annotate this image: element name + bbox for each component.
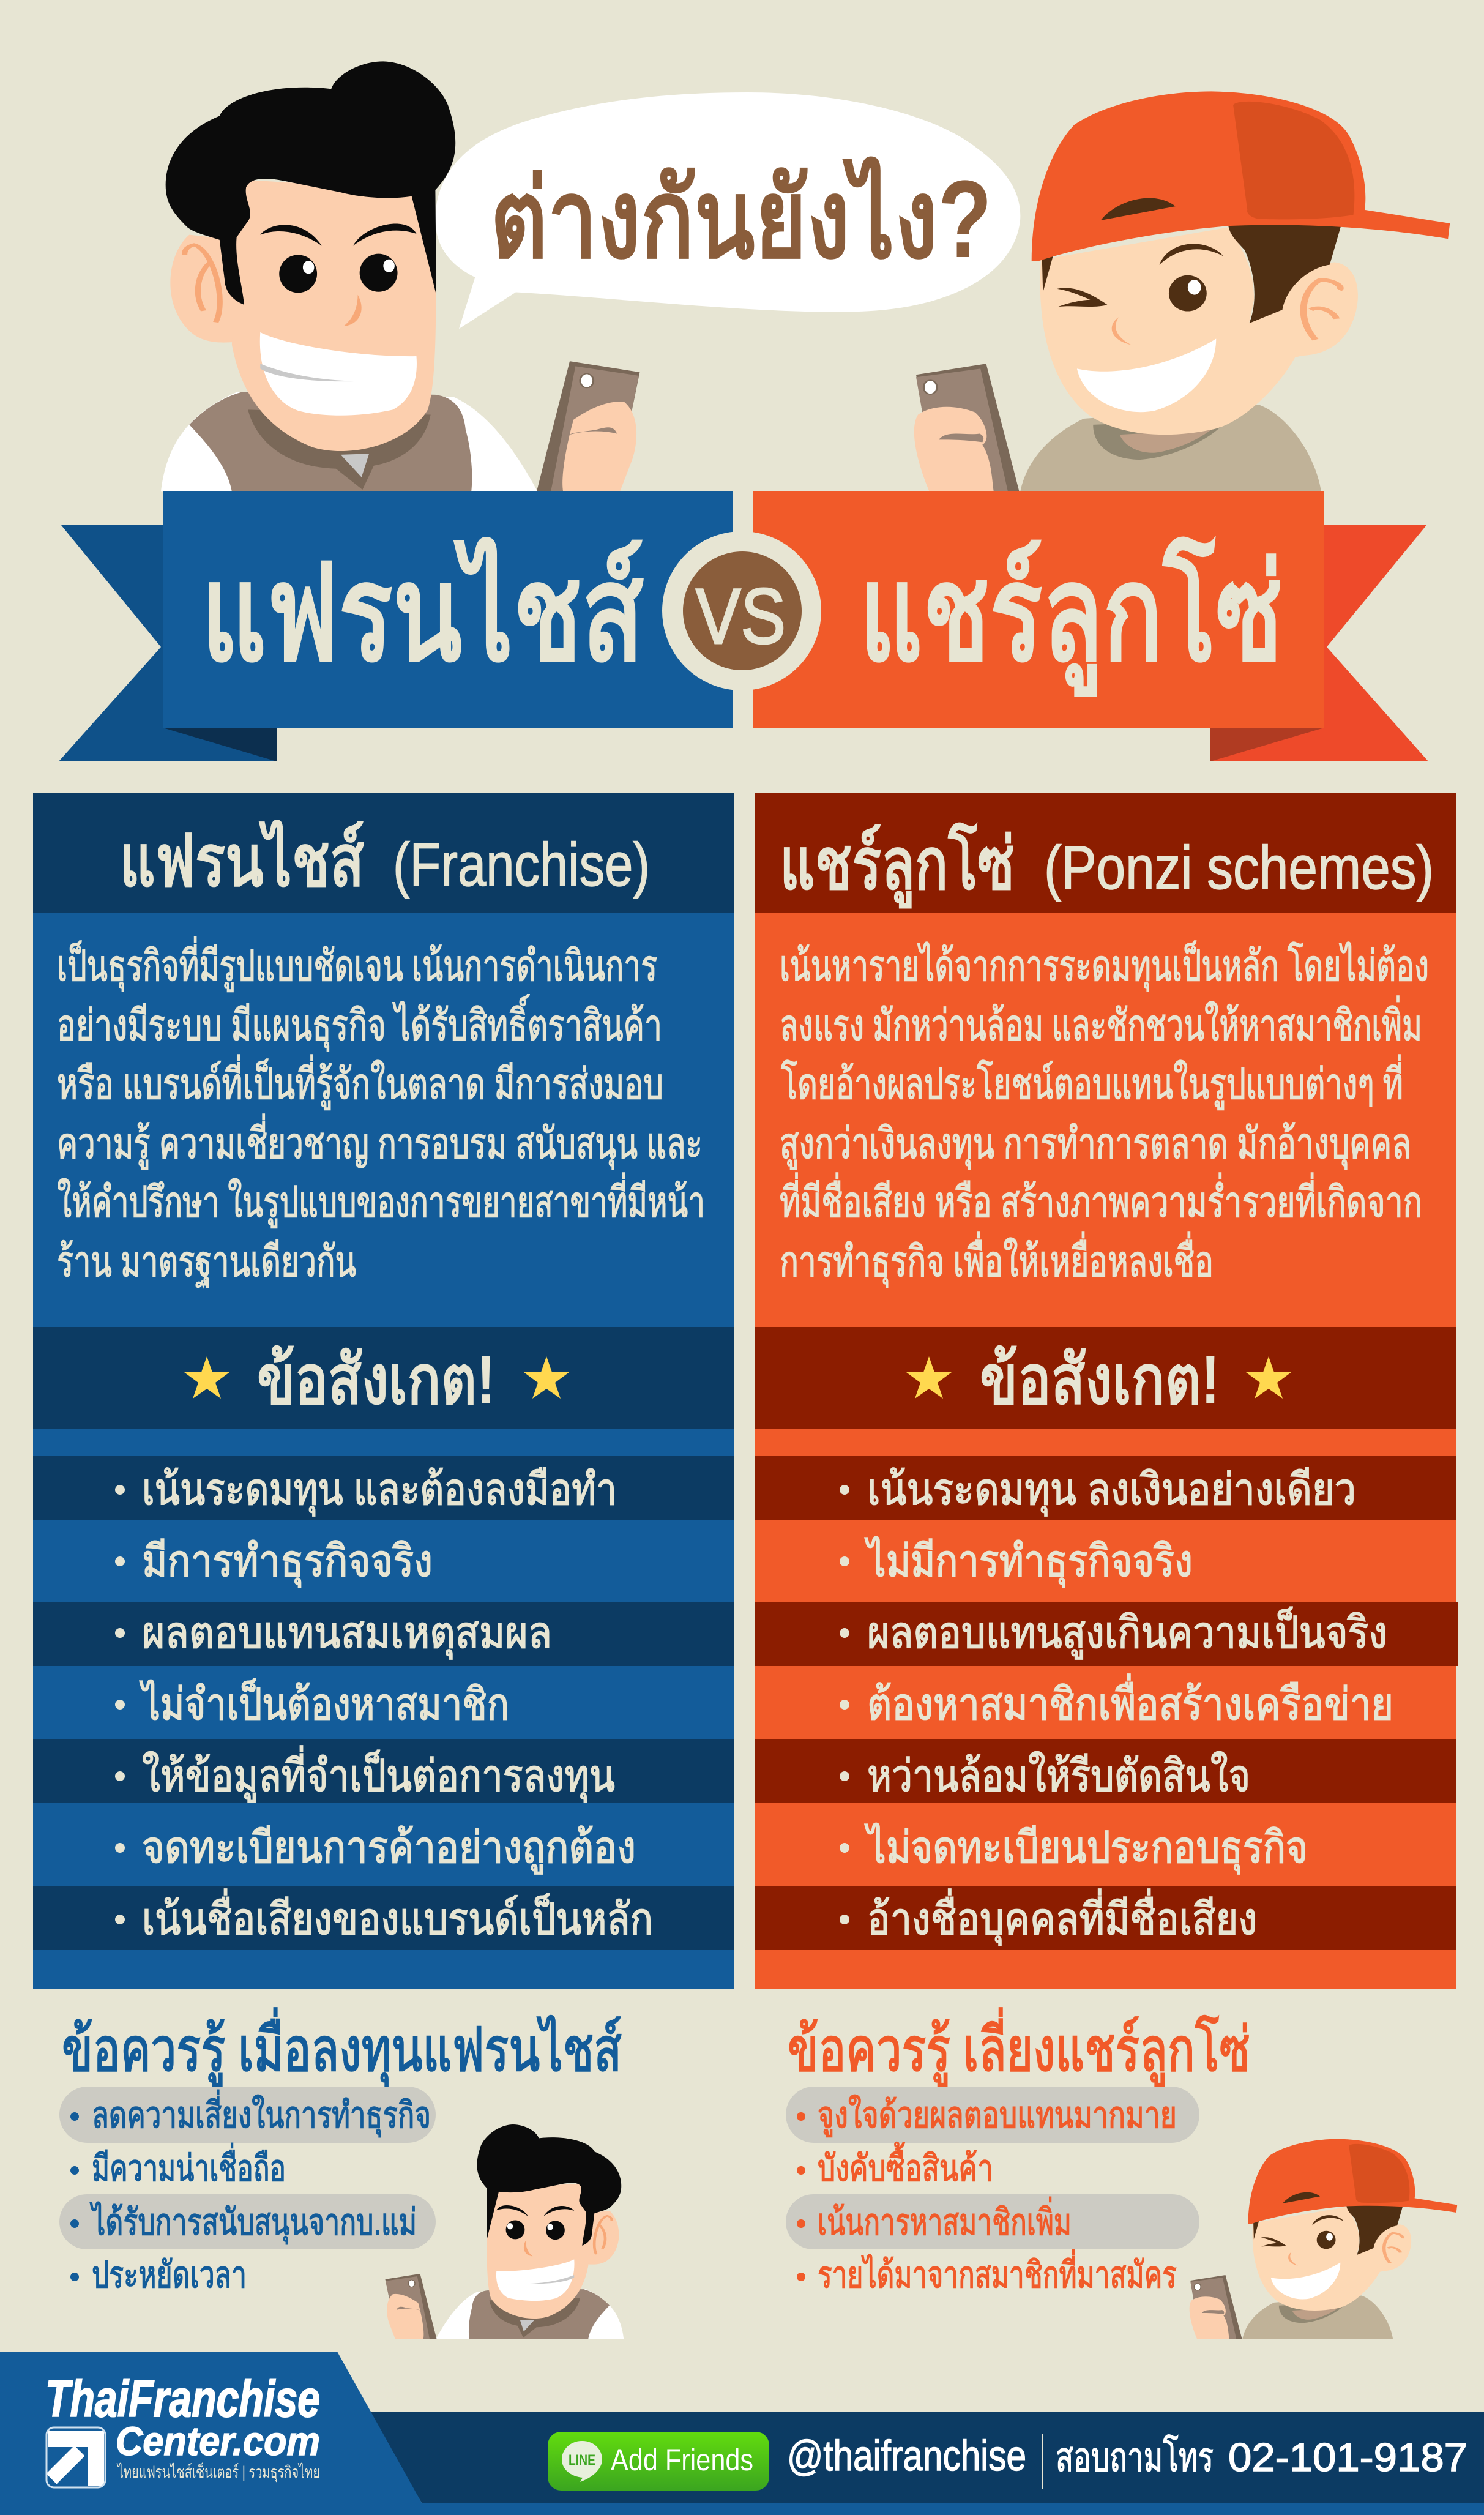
VS badge bbox=[662, 531, 821, 690]
warning signs heading: ponzi: ข้อสังเกต! bbox=[980, 1342, 1220, 1418]
list rows: franchise: ให้ข้อมูลที่จำเป็นต่อการลงทุน bbox=[142, 1746, 615, 1803]
icon: LINE bubble: LINE bbox=[569, 2452, 595, 2468]
list rows: ponzi: ต้องหาสมาชิกเพื่อสร้างเครือข่าย bbox=[867, 1674, 1393, 1729]
tips list: franchise: มีความน่าเชื่อถือ bbox=[92, 2143, 286, 2189]
panel heading: franchise: แฟรนไชส์ bbox=[119, 820, 364, 902]
tips list: ponzi: เน้นการหาสมาชิกเพิ่ม bbox=[818, 2197, 1072, 2243]
description: franchise: เป็นธุรกิจที่มีรูปแบบชัดเจน เน้นการดำเนินการ bbox=[57, 936, 657, 992]
banner title: franchise: แฟรนไชส์ bbox=[201, 537, 644, 689]
section: franchise tips bbox=[59, 2008, 622, 2295]
phone contact: 02-101-9187 bbox=[1228, 2435, 1467, 2479]
LINE account: @thaifranchise bbox=[787, 2432, 1026, 2479]
tips list: franchise: ประหยัดเวลา bbox=[92, 2254, 247, 2295]
description: ponzi bbox=[780, 941, 1429, 1288]
heading: franchise tips: ข้อควรรู้ เมื่อลงทุนแฟรนไชส์ bbox=[62, 2008, 622, 2087]
tips list: ponzi: บังคับซื้อสินค้า bbox=[818, 2142, 993, 2189]
LINE add friends button: Add Friends bbox=[611, 2443, 753, 2477]
banner: ponzi bbox=[753, 491, 1324, 728]
description: franchise: หรือ แบรนด์ที่เป็นที่รู้จักในตลาด มีการส่งมอบ bbox=[57, 1055, 663, 1110]
list rows: franchise bbox=[33, 1456, 734, 1950]
small character: boy bbox=[1190, 2139, 1457, 2339]
speech bubble bbox=[435, 92, 1020, 329]
tips list: franchise bbox=[70, 2090, 431, 2295]
list rows: ponzi: ไม่มีการทำธุรกิจจริง bbox=[865, 1536, 1193, 1588]
small character: man bbox=[385, 2124, 624, 2339]
warning signs heading: franchise: ข้อสังเกต! bbox=[257, 1342, 495, 1418]
icon: arrow bbox=[47, 2427, 105, 2487]
heading: ponzi tips: ข้อควรรู้ เลี่ยงแชร์ลูกโซ่ bbox=[788, 2008, 1250, 2087]
description: franchise bbox=[57, 936, 705, 1287]
warning signs heading: ponzi bbox=[755, 1327, 1456, 1429]
list rows: ponzi: อ้างชื่อบุคคลที่มีชื่อเสียง bbox=[867, 1889, 1257, 1946]
list rows: ponzi: เน้นระดมทุน ลงเงินอย่างเดียว bbox=[867, 1465, 1356, 1516]
description: franchise: ความรู้ ความเชี่ยวชาญ การอบรม สนับสนุน และ bbox=[57, 1114, 703, 1170]
list rows: ponzi: หว่านล้อมให้รีบตัดสินใจ bbox=[867, 1751, 1250, 1801]
logo: ThaiFranchise Center: ThaiFranchise bbox=[45, 2370, 320, 2427]
tips list: ponzi bbox=[797, 2095, 1177, 2295]
logo: ThaiFranchise Center: Center.com bbox=[116, 2418, 320, 2464]
VS badge: VS bbox=[696, 573, 786, 660]
speech bubble title: ต่างกันยังไง? bbox=[490, 156, 992, 281]
description: franchise: ร้าน มาตรฐานเดียวกัน bbox=[57, 1238, 356, 1287]
warning signs heading: franchise bbox=[33, 1327, 734, 1429]
list rows: franchise: ไม่จำเป็นต้องหาสมาชิก bbox=[140, 1678, 509, 1729]
panel heading: ponzi: แชร์ลูกโซ่ bbox=[780, 822, 1015, 909]
panel heading: franchise: (Franchise) bbox=[393, 831, 650, 899]
panel heading: franchise bbox=[33, 793, 734, 913]
LINE add friends button bbox=[548, 2432, 769, 2491]
character: boy in orange cap bbox=[914, 91, 1450, 491]
ribbon tail: right bbox=[1210, 525, 1428, 761]
list rows: franchise: จดทะเบียนการค้าอย่างถูกต้อง bbox=[142, 1823, 636, 1874]
banner title: ponzi: แชร์ลูกโซ่ bbox=[859, 536, 1283, 698]
tips list: ponzi: จูงใจด้วยผลตอบแทนมากมาย bbox=[818, 2095, 1177, 2137]
description: franchise: อย่างมีระบบ มีแผนธุรกิจ ได้รับสิทธิ์ตราสินค้า bbox=[57, 995, 662, 1052]
description: franchise: ให้คำปรึกษา ในรูปแบบของการขยายสาขาที่มีหน้า bbox=[57, 1173, 705, 1228]
list rows: franchise: ผลตอบแทนสมเหตุสมผล bbox=[142, 1609, 552, 1659]
list rows: ponzi bbox=[755, 1456, 1458, 1950]
footer band bbox=[0, 2352, 1484, 2515]
list rows: franchise: เน้นระดมทุน และต้องลงมือทำ bbox=[142, 1465, 617, 1516]
logo: ThaiFranchise Center: ไทยแฟรนไชส์เซ็นเตอร์ | รวมธุรกิจไทย bbox=[117, 2461, 320, 2483]
tips list: franchise: ได้รับการสนับสนุนจากบ.แม่ bbox=[90, 2201, 417, 2244]
section: ponzi tips bbox=[786, 2008, 1250, 2295]
list rows: franchise: เน้นชื่อเสียงของแบรนด์เป็นหลัก bbox=[142, 1889, 653, 1944]
panel: franchise bbox=[33, 793, 734, 1989]
ribbon tail: left bbox=[59, 525, 277, 761]
logo: ThaiFranchise Center bbox=[45, 2370, 320, 2487]
list rows: franchise: มีการทำธุรกิจจริง bbox=[142, 1537, 433, 1588]
panel heading: ponzi bbox=[755, 793, 1456, 913]
panel: ponzi bbox=[755, 793, 1458, 1989]
list rows: ponzi: ผลตอบแทนสูงเกินความเป็นจริง bbox=[867, 1607, 1387, 1659]
tips list: franchise: ลดความเสี่ยงในการทำธุรกิจ bbox=[92, 2090, 431, 2137]
tips list: ponzi: รายได้มาจากสมาชิกที่มาสมัคร bbox=[818, 2249, 1177, 2295]
character: man with phone bbox=[161, 61, 639, 491]
icon: LINE bubble bbox=[562, 2441, 602, 2482]
description: ponzi: การทำธุรกิจ เพื่อให้เหยื่อหลงเชื่อ bbox=[780, 1232, 1214, 1288]
phone contact bbox=[1056, 2434, 1467, 2479]
phone contact: สอบถามโทร bbox=[1056, 2434, 1214, 2479]
list rows: ponzi: ไม่จดทะเบียนประกอบธุรกิจ bbox=[865, 1823, 1308, 1874]
banner: franchise bbox=[163, 491, 733, 728]
